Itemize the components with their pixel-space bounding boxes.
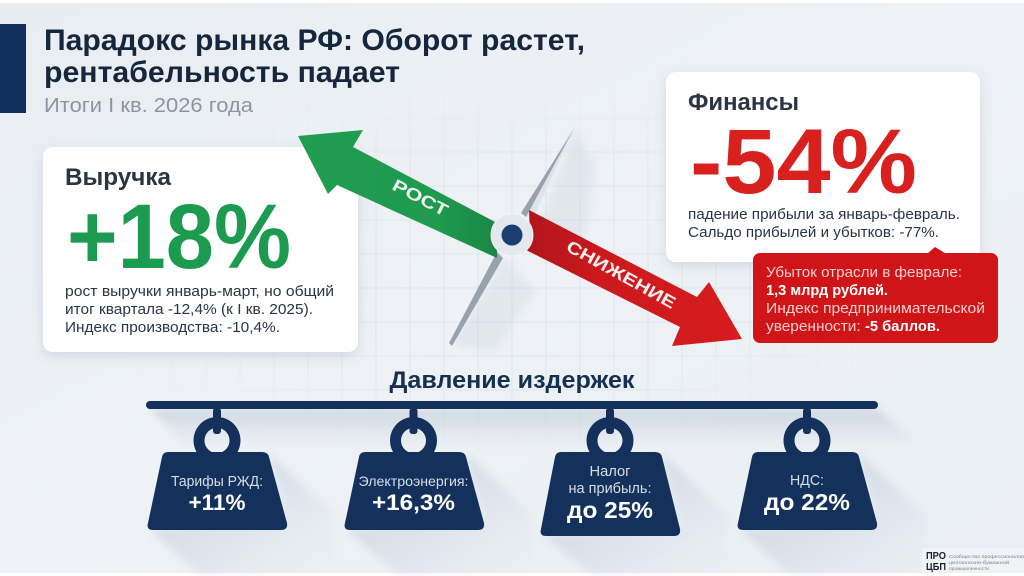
callout: losses: 1,3 млрд рублей. <box>766 283 888 299</box>
finance description: Сальдо прибылей и убытков: -77%. <box>688 224 939 241</box>
finance description: падение прибыли за январь-февраль. <box>688 206 960 223</box>
needle <box>449 127 595 352</box>
title: Парадокс рынка РФ: Оборот растет, <box>44 24 585 57</box>
panel: revenue card <box>43 147 358 356</box>
weight: rail tariffs <box>148 408 287 530</box>
logo: целлюлозно-бумажной <box>949 559 1010 565</box>
logo: ЦБП <box>926 562 946 573</box>
weight: profit tax: до 25% <box>567 497 653 523</box>
weight: profit tax: Налог <box>590 464 630 480</box>
logo: Сообщество профессионалов <box>949 554 1024 559</box>
hub <box>491 214 533 256</box>
title accent bar <box>0 24 26 113</box>
callout: losses: -5 баллов. <box>865 319 940 335</box>
revenue value: +18% <box>67 186 291 288</box>
finance heading: Финансы <box>688 89 799 116</box>
callout: losses: уверенности: <box>766 319 865 335</box>
weight: electricity <box>345 408 484 530</box>
subtitle: Итоги I кв. 2026 года <box>44 95 254 117</box>
weight: VAT: НДС: <box>790 473 824 489</box>
weight: electricity: Электроэнергия: <box>358 473 468 489</box>
weight: rail tariffs: Тарифы РЖД: <box>171 474 263 490</box>
revenue heading: Выручка <box>65 164 172 191</box>
weight: profit tax: на прибыль: <box>568 481 652 497</box>
revenue description: рост выручки январь-март, но общий <box>65 283 334 300</box>
callout: losses: Индекс предпринимательской <box>766 301 985 317</box>
weight: rail tariffs: +11% <box>188 490 246 515</box>
logo: ПРО <box>926 551 946 562</box>
title: рентабельность падает <box>44 56 400 89</box>
revenue description: итог квартала -12,4% (к I кв. 2025). <box>65 301 313 318</box>
callout: losses: Убыток отрасли в феврале: <box>766 265 962 281</box>
weight: VAT <box>738 408 877 530</box>
shadows of beam and weights <box>150 409 925 575</box>
callout: losses <box>753 247 998 343</box>
finance value: -54% <box>690 111 917 213</box>
panel: finance card <box>666 72 980 266</box>
logo <box>922 548 1024 573</box>
arrow label: growth: РОСТ <box>389 176 452 221</box>
beam <box>146 401 878 409</box>
heading: cost pressure: Давление издержек <box>390 367 636 394</box>
arrow: decline <box>526 210 742 346</box>
revenue description: Индекс производства: -10,4%. <box>65 319 280 336</box>
arrow: growth <box>298 130 497 258</box>
weight: VAT: до 22% <box>764 489 850 515</box>
weight: electricity: +16,3% <box>372 490 455 515</box>
logo: промышленности <box>949 566 990 571</box>
arrow label: decline: СНИЖЕНИЕ <box>563 237 679 313</box>
weight: profit tax <box>541 408 680 536</box>
